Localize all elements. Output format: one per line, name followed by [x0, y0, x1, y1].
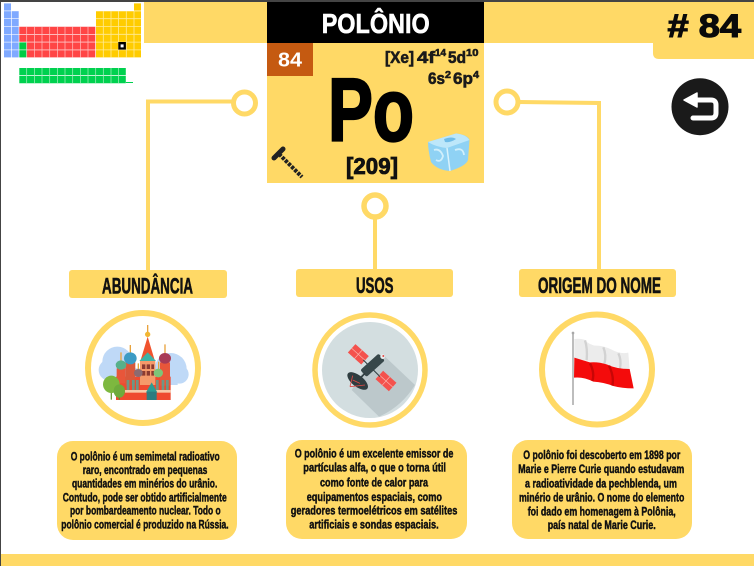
title: [267, 2, 484, 43]
icon: Saint Basil's Cathedral: [88, 313, 198, 423]
text block: abundance: polônio comercial é produzido na Rússia.: [61, 517, 229, 531]
text block: abundance: Contudo, pode ser obtido artificialmente: [63, 490, 227, 504]
atomic number: [267, 43, 313, 76]
heading: name origin: ORIGEM DO NOME: [538, 273, 661, 298]
heading: abundance: ABUNDÂNCIA: [102, 274, 193, 298]
text block: name origin: a radioatividade da pechblenda, um: [525, 476, 677, 490]
text block: abundance: [57, 441, 237, 540]
icon: Polish flag: [542, 314, 652, 424]
heading: abundance: [69, 270, 227, 298]
text block: uses: artificiais e sondas espaciais.: [309, 517, 439, 531]
connector: name origin: [496, 91, 599, 269]
text block: name origin: [512, 440, 692, 539]
title: POLÔNIO: [322, 7, 430, 39]
heading: name origin: [519, 269, 676, 298]
text block: name origin: país natal de Marie Curie.: [548, 518, 656, 532]
electron configuration: [Xe]: [385, 49, 414, 67]
element card: [267, 2, 484, 183]
bottom band: [1, 554, 754, 566]
electron configuration: 2: [445, 70, 451, 81]
text block: name origin: foi dado em homenagem à Polônia,: [528, 505, 676, 519]
electron configuration: 10: [466, 48, 479, 59]
electron configuration: 4: [473, 70, 479, 81]
panel: name origin: [512, 269, 692, 539]
text block: uses: partículas alfa, o que o torna útil: [303, 461, 446, 475]
icon: ice cube: [428, 134, 470, 171]
atomic number: 84: [278, 50, 303, 72]
panel: abundance: [57, 270, 237, 540]
panel: uses: [286, 269, 467, 539]
text block: uses: como fonte de calor para: [320, 475, 428, 489]
top band: [144, 2, 754, 43]
text block: name origin: minério de urânio. O nome do elemento: [519, 490, 684, 504]
atomic number tab: [653, 8, 754, 59]
connector: abundance: [148, 92, 256, 270]
atomic mass: [209]: [346, 153, 398, 179]
text block: name origin: Marie e Pierre Curie quando estudavam: [518, 462, 684, 476]
electron configuration: [385, 48, 479, 88]
connector: uses: [364, 195, 386, 269]
heading: uses: USOS: [356, 273, 394, 298]
element symbol: Po: [328, 60, 414, 160]
periodic table mini map: [4, 3, 141, 83]
text block: abundance: raro, encontrado em pequenas: [83, 463, 208, 477]
text block: abundance: O polônio é um semimetal radioativo: [71, 450, 220, 464]
text block: abundance: quantidades em minérios do urânio.: [72, 476, 217, 490]
text block: uses: [286, 440, 467, 539]
polonium marker: [118, 42, 126, 50]
heading: uses: [296, 269, 453, 298]
electron configuration: 4f: [417, 48, 435, 67]
text block: uses: O polônio é um excelente emissor de: [295, 446, 454, 460]
atomic number tab: # 84: [667, 8, 741, 44]
electron configuration: 6p: [453, 69, 473, 88]
icon: satellite: [315, 315, 425, 425]
text block: uses: equipamentos espaciais, como: [307, 490, 442, 504]
electron configuration: 14: [435, 48, 446, 59]
text block: name origin: O polônio foi descoberto em 1898 por: [523, 448, 681, 462]
icon: screw: [274, 149, 302, 177]
electron configuration: 5d: [448, 48, 466, 67]
text block: uses: geradores termoelétricos em satélites: [291, 503, 458, 517]
back button icon: [672, 78, 728, 135]
text block: abundance: por bombardeamento nuclear. Todo o: [70, 504, 221, 518]
electron configuration: 6s: [428, 69, 445, 88]
